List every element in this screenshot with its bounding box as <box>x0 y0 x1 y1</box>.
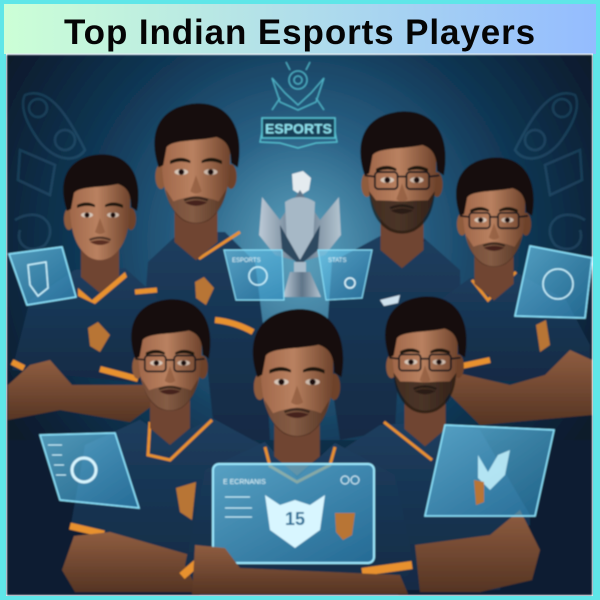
player: back row third from left <box>326 111 462 440</box>
trophy <box>259 171 341 297</box>
holo panel: centre right <box>318 250 372 300</box>
holo panel: upper right <box>515 246 592 318</box>
holo panel: centre main <box>213 464 374 563</box>
player: centre front <box>182 309 414 595</box>
holo panel: centre main: 15 <box>285 509 305 529</box>
holo panel: lower right <box>425 425 554 516</box>
esports emblem <box>260 62 337 148</box>
holo panel: centre right: STATS <box>328 258 346 264</box>
title: Top Indian Esports Players <box>64 13 536 52</box>
crossed arms: centre player <box>192 545 408 594</box>
player: back row far left <box>8 154 166 422</box>
holo panel: lower left <box>40 433 139 508</box>
bottom border <box>0 596 600 600</box>
decorative swirls right <box>515 93 585 249</box>
holo panel: centre main: E ECRNANIS <box>223 479 266 486</box>
esports emblem: ESPORTS <box>265 120 332 136</box>
player: front row left <box>62 299 262 592</box>
title banner background <box>4 4 596 54</box>
holo panel: centre left <box>224 250 284 300</box>
player: back row second from left <box>142 103 270 440</box>
holo panel: centre left: ESPORTS <box>232 258 261 264</box>
player: back row far right <box>432 158 592 425</box>
player: front row right <box>342 296 540 592</box>
holo panel: upper left <box>9 247 76 305</box>
decorative swirls left <box>15 93 85 249</box>
